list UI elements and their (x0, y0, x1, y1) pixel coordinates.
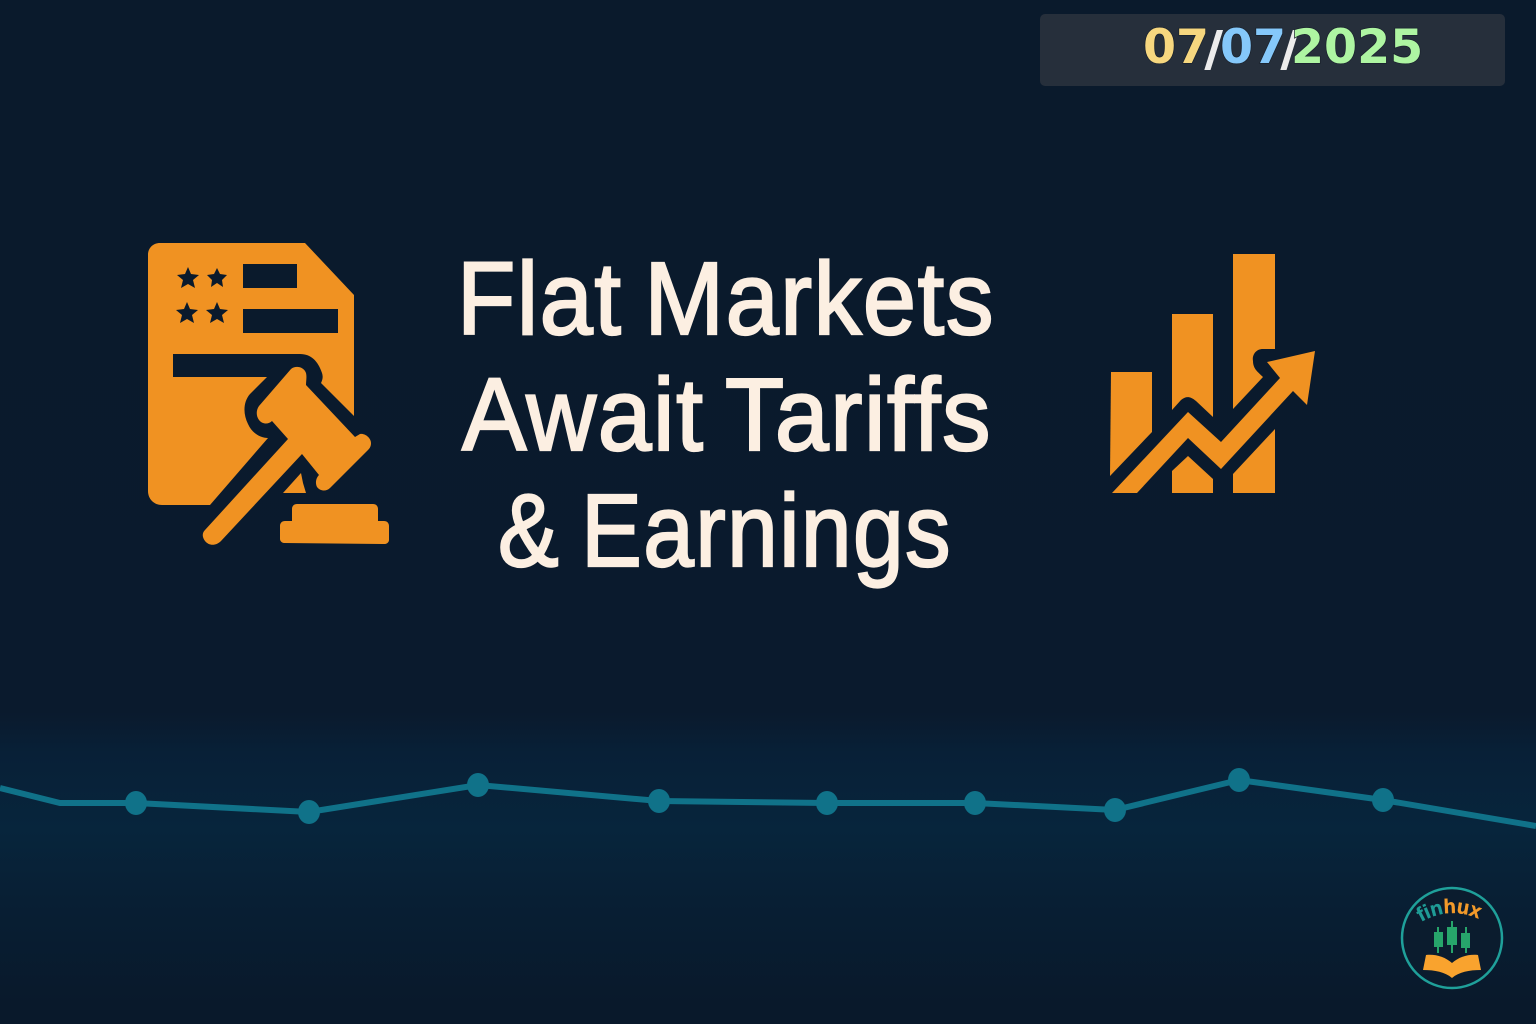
title: Flat Markets (457, 241, 995, 356)
date badge: / (1281, 22, 1299, 77)
date badge: 2025 (1291, 20, 1423, 75)
title: & Earnings (498, 473, 952, 588)
date badge: 07 (1143, 20, 1209, 75)
logo: finhux (1400, 886, 1504, 990)
icon: tariff document with gavel (148, 243, 389, 545)
icon: bar chart with rising arrow (1110, 254, 1315, 493)
date badge (1040, 14, 1505, 86)
date badge: 07 (1220, 20, 1286, 75)
date badge: / (1205, 22, 1223, 77)
title (457, 241, 995, 588)
logo: finhux: finhux (1416, 898, 1482, 922)
title: Await Tariffs (462, 357, 992, 472)
line chart (0, 768, 1536, 826)
